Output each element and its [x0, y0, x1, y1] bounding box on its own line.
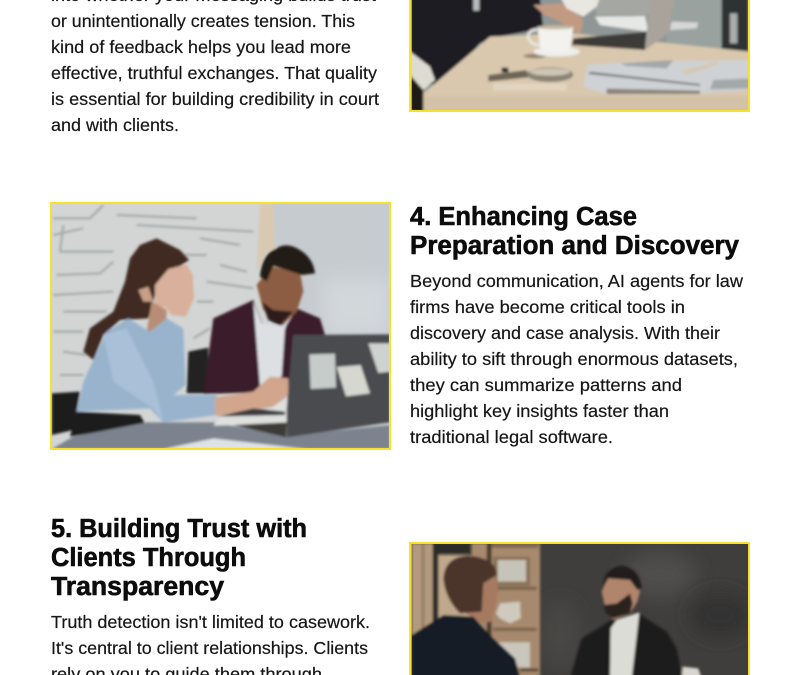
text block: section 3 closing paragraph [51, 0, 379, 135]
heading: section 5: Clients Through [51, 544, 246, 572]
text block: section 4 paragraph: traditional legal software. [410, 427, 613, 447]
heading: section 5: 5. Building Trust with [51, 515, 307, 543]
heading: section 5: Transparency [51, 573, 225, 601]
text block: section 3 closing paragraph: or unintentionally creates tension. This [51, 11, 355, 31]
text block: section 4 paragraph: they can summarize patterns and [410, 375, 682, 395]
text block: section 5 paragraph [51, 612, 370, 675]
text block: section 4 paragraph: firms have become critical tools in [410, 297, 685, 317]
photo: desk with coffee cup, magnifier and newspaper [409, 0, 750, 113]
text block: section 4 paragraph: discovery and case analysis. With their [410, 323, 720, 343]
photo: colleagues reviewing a laptop [50, 202, 392, 450]
text block: section 3 closing paragraph: kind of feedback helps you lead more [51, 37, 351, 57]
text block: section 3 closing paragraph: and with clients. [51, 115, 179, 135]
text block: section 5 paragraph: Truth detection isn't limited to casework. [51, 612, 370, 632]
heading: section 5 [51, 515, 307, 601]
photo: two men shaking hands in an office [409, 542, 750, 675]
text block: section 3 closing paragraph: is essential for building credibility in court [51, 89, 379, 109]
text block: section 5 paragraph: It's central to client relationships. Clients [51, 638, 368, 658]
text block: section 4 paragraph: highlight key insights faster than [410, 401, 669, 421]
heading: section 4: Preparation and Discovery [410, 232, 740, 260]
text block: section 4 paragraph: Beyond communication, AI agents for law [410, 271, 743, 291]
text block: section 4 paragraph: ability to sift through enormous datasets, [410, 349, 738, 369]
text block: section 4 paragraph [410, 271, 743, 447]
text block: section 3 closing paragraph: effective, truthful exchanges. That quality [51, 63, 377, 83]
heading: section 4: 4. Enhancing Case [410, 203, 637, 231]
heading: section 4 [410, 203, 740, 260]
